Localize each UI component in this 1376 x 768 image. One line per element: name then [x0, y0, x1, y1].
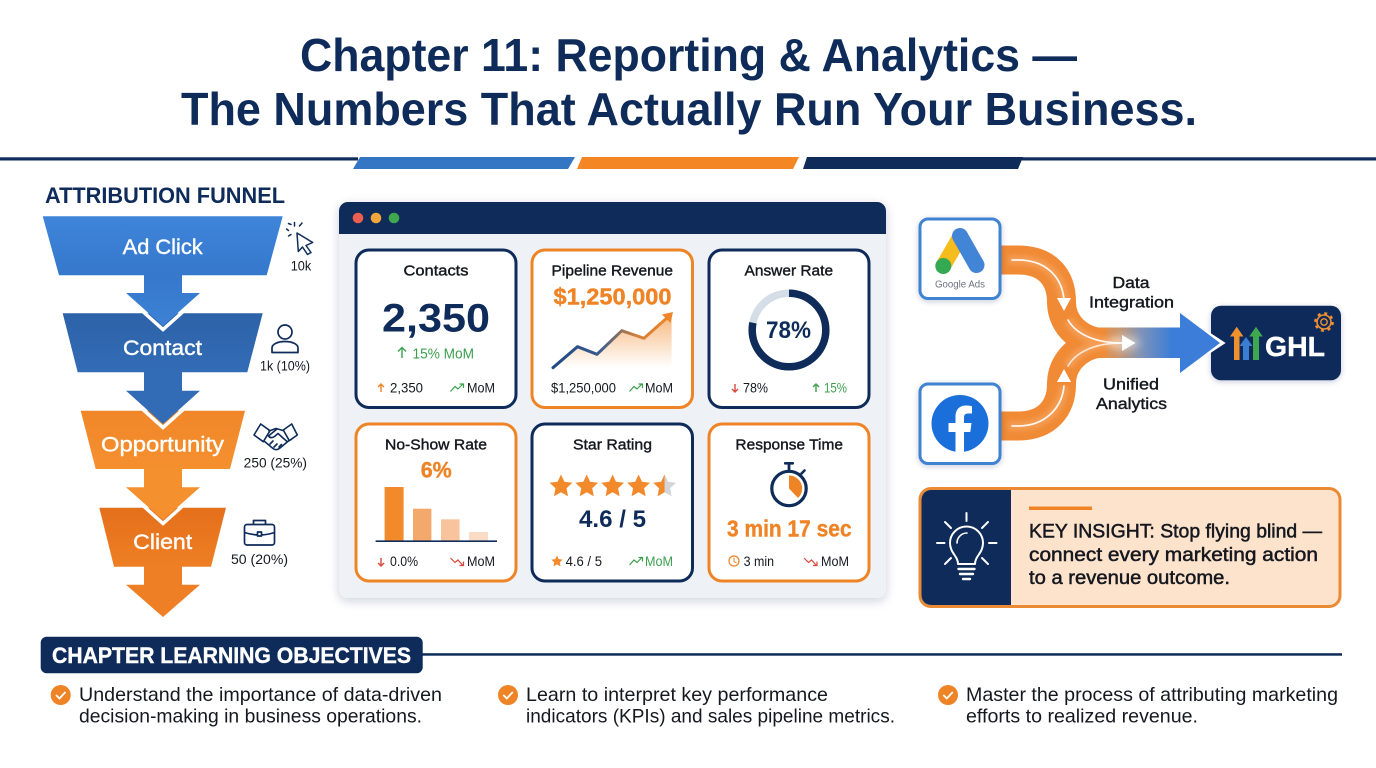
card: no-show rate: 0.0%	[390, 554, 418, 569]
card: contacts: 2,350	[382, 296, 490, 340]
card: contacts: 2,350	[390, 380, 423, 396]
title	[181, 29, 1197, 135]
card: contacts: 15% MoM	[412, 346, 474, 362]
title: Chapter 11: Reporting & Analytics —	[300, 29, 1077, 81]
title: The Numbers That Actually Run Your Business.	[181, 83, 1197, 135]
objective 1	[51, 684, 442, 728]
funnel stage: client	[99, 508, 226, 617]
objective 1: Understand the importance of data-driven	[79, 684, 442, 706]
card: star rating: MoM	[645, 554, 673, 569]
icon: cursor with 10k label	[286, 222, 313, 274]
funnel stage: opportunity	[81, 411, 245, 469]
card: contacts	[356, 250, 516, 408]
card: pipeline revenue: Pipeline Revenue	[552, 262, 673, 280]
card: pipeline revenue: MoM	[645, 380, 673, 396]
card: answer rate	[709, 250, 869, 408]
funnel stage: opportunity: Opportunity	[101, 433, 224, 457]
icon: handshake with 250 label	[244, 424, 307, 471]
icon: handshake with 250 label: 250 (25%)	[244, 456, 307, 471]
panel: dashboard window	[339, 202, 886, 598]
card: star rating	[532, 424, 692, 581]
section rule	[420, 653, 1342, 656]
GHL logo card: GHL	[1265, 331, 1325, 362]
objective 2: indicators (KPIs) and sales pipeline metrics.	[526, 706, 895, 728]
icon: person with 1k label: 1k (10%)	[260, 359, 310, 374]
objective 3: Master the process of attributing marketing	[966, 684, 1338, 706]
label: unified analytics: Analytics	[1096, 396, 1167, 413]
window title bar	[339, 202, 886, 234]
card: no-show rate: MoM	[467, 554, 495, 569]
card: response time: Response Time	[735, 436, 843, 454]
icon: stopwatch	[772, 462, 806, 506]
card: no-show rate	[356, 424, 516, 581]
card: response time	[709, 424, 869, 581]
objective 3: efforts to realized revenue.	[966, 706, 1198, 728]
callout: key insight	[920, 488, 1340, 606]
data flow connector	[1000, 260, 1183, 426]
funnel stage: ad click: Ad Click	[123, 235, 203, 259]
donut chart	[752, 293, 826, 367]
insight text: connect every marketing action	[1029, 544, 1318, 566]
icon: cursor with 10k label: 10k	[291, 259, 311, 274]
funnel stage: client: Client	[133, 531, 192, 554]
card: response time: 3 min	[744, 554, 774, 569]
icon: person with 1k label	[260, 325, 310, 374]
card: no-show rate: 6%	[421, 458, 452, 482]
card: pipeline revenue: $1,250,000	[551, 380, 616, 396]
funnel white chevron gaps	[137, 306, 189, 524]
card: pipeline revenue: $1,250,000	[554, 284, 672, 310]
card: star rating: 4.6 / 5	[566, 554, 602, 569]
card: response time: 3 min 17 sec	[727, 516, 852, 542]
bar chart	[376, 487, 497, 542]
card: pipeline revenue	[532, 250, 692, 408]
card: answer rate: 15%	[824, 380, 847, 396]
objective 1: decision-making in business operations.	[79, 706, 422, 728]
funnel connecting arrows	[126, 275, 200, 520]
icon: light bulb	[937, 513, 996, 579]
objective 2	[498, 684, 895, 728]
arrowhead into GHL	[1180, 313, 1222, 373]
attribution funnel	[43, 216, 283, 617]
line chart	[553, 312, 673, 368]
icon: google ads card: Google Ads	[935, 278, 985, 290]
card: response time: MoM	[821, 554, 849, 569]
card: contacts: Contacts	[404, 262, 468, 280]
label: data integration: Data	[1112, 275, 1150, 292]
card: answer rate: Answer Rate	[745, 262, 833, 280]
insight text: KEY INSIGHT: Stop flying blind —	[1029, 520, 1322, 542]
insight text	[1029, 520, 1322, 589]
funnel stage: ad click	[43, 216, 283, 275]
card: star rating: Star Rating	[573, 436, 652, 454]
heading: chapter learning objectives	[41, 637, 423, 673]
objective 3	[938, 684, 1338, 728]
label: data integration	[1089, 275, 1174, 312]
heading: chapter learning objectives: CHAPTER LEARNING OBJECTIVES	[52, 643, 411, 668]
card: answer rate: 78%	[743, 380, 768, 396]
logo arrows	[1230, 327, 1263, 360]
card: contacts: MoM	[467, 380, 495, 396]
icon: facebook card	[920, 384, 1000, 464]
card: no-show rate: No-Show Rate	[385, 436, 487, 454]
label: data integration: Integration	[1089, 295, 1174, 312]
icon: briefcase with 50 label: 50 (20%)	[231, 552, 288, 567]
card: star rating: 4.6 / 5	[579, 506, 646, 533]
flow arrows	[1012, 260, 1122, 426]
donut chart: 78%	[766, 317, 811, 344]
objective 2: Learn to interpret key performance	[526, 684, 828, 706]
GHL logo card	[1211, 306, 1341, 380]
icon: google ads card	[920, 219, 1000, 298]
icon: gear	[1315, 313, 1333, 331]
icon: briefcase with 50 label	[231, 520, 288, 567]
heading: attribution funnel: ATTRIBUTION FUNNEL	[45, 183, 285, 208]
funnel stage: contact	[63, 313, 263, 372]
insight text: to a revenue outcome.	[1029, 567, 1230, 589]
funnel stage: contact: Contact	[123, 337, 202, 360]
title divider	[0, 157, 1376, 169]
label: unified analytics	[1096, 376, 1167, 413]
stars	[550, 474, 676, 496]
label: unified analytics: Unified	[1103, 376, 1159, 394]
